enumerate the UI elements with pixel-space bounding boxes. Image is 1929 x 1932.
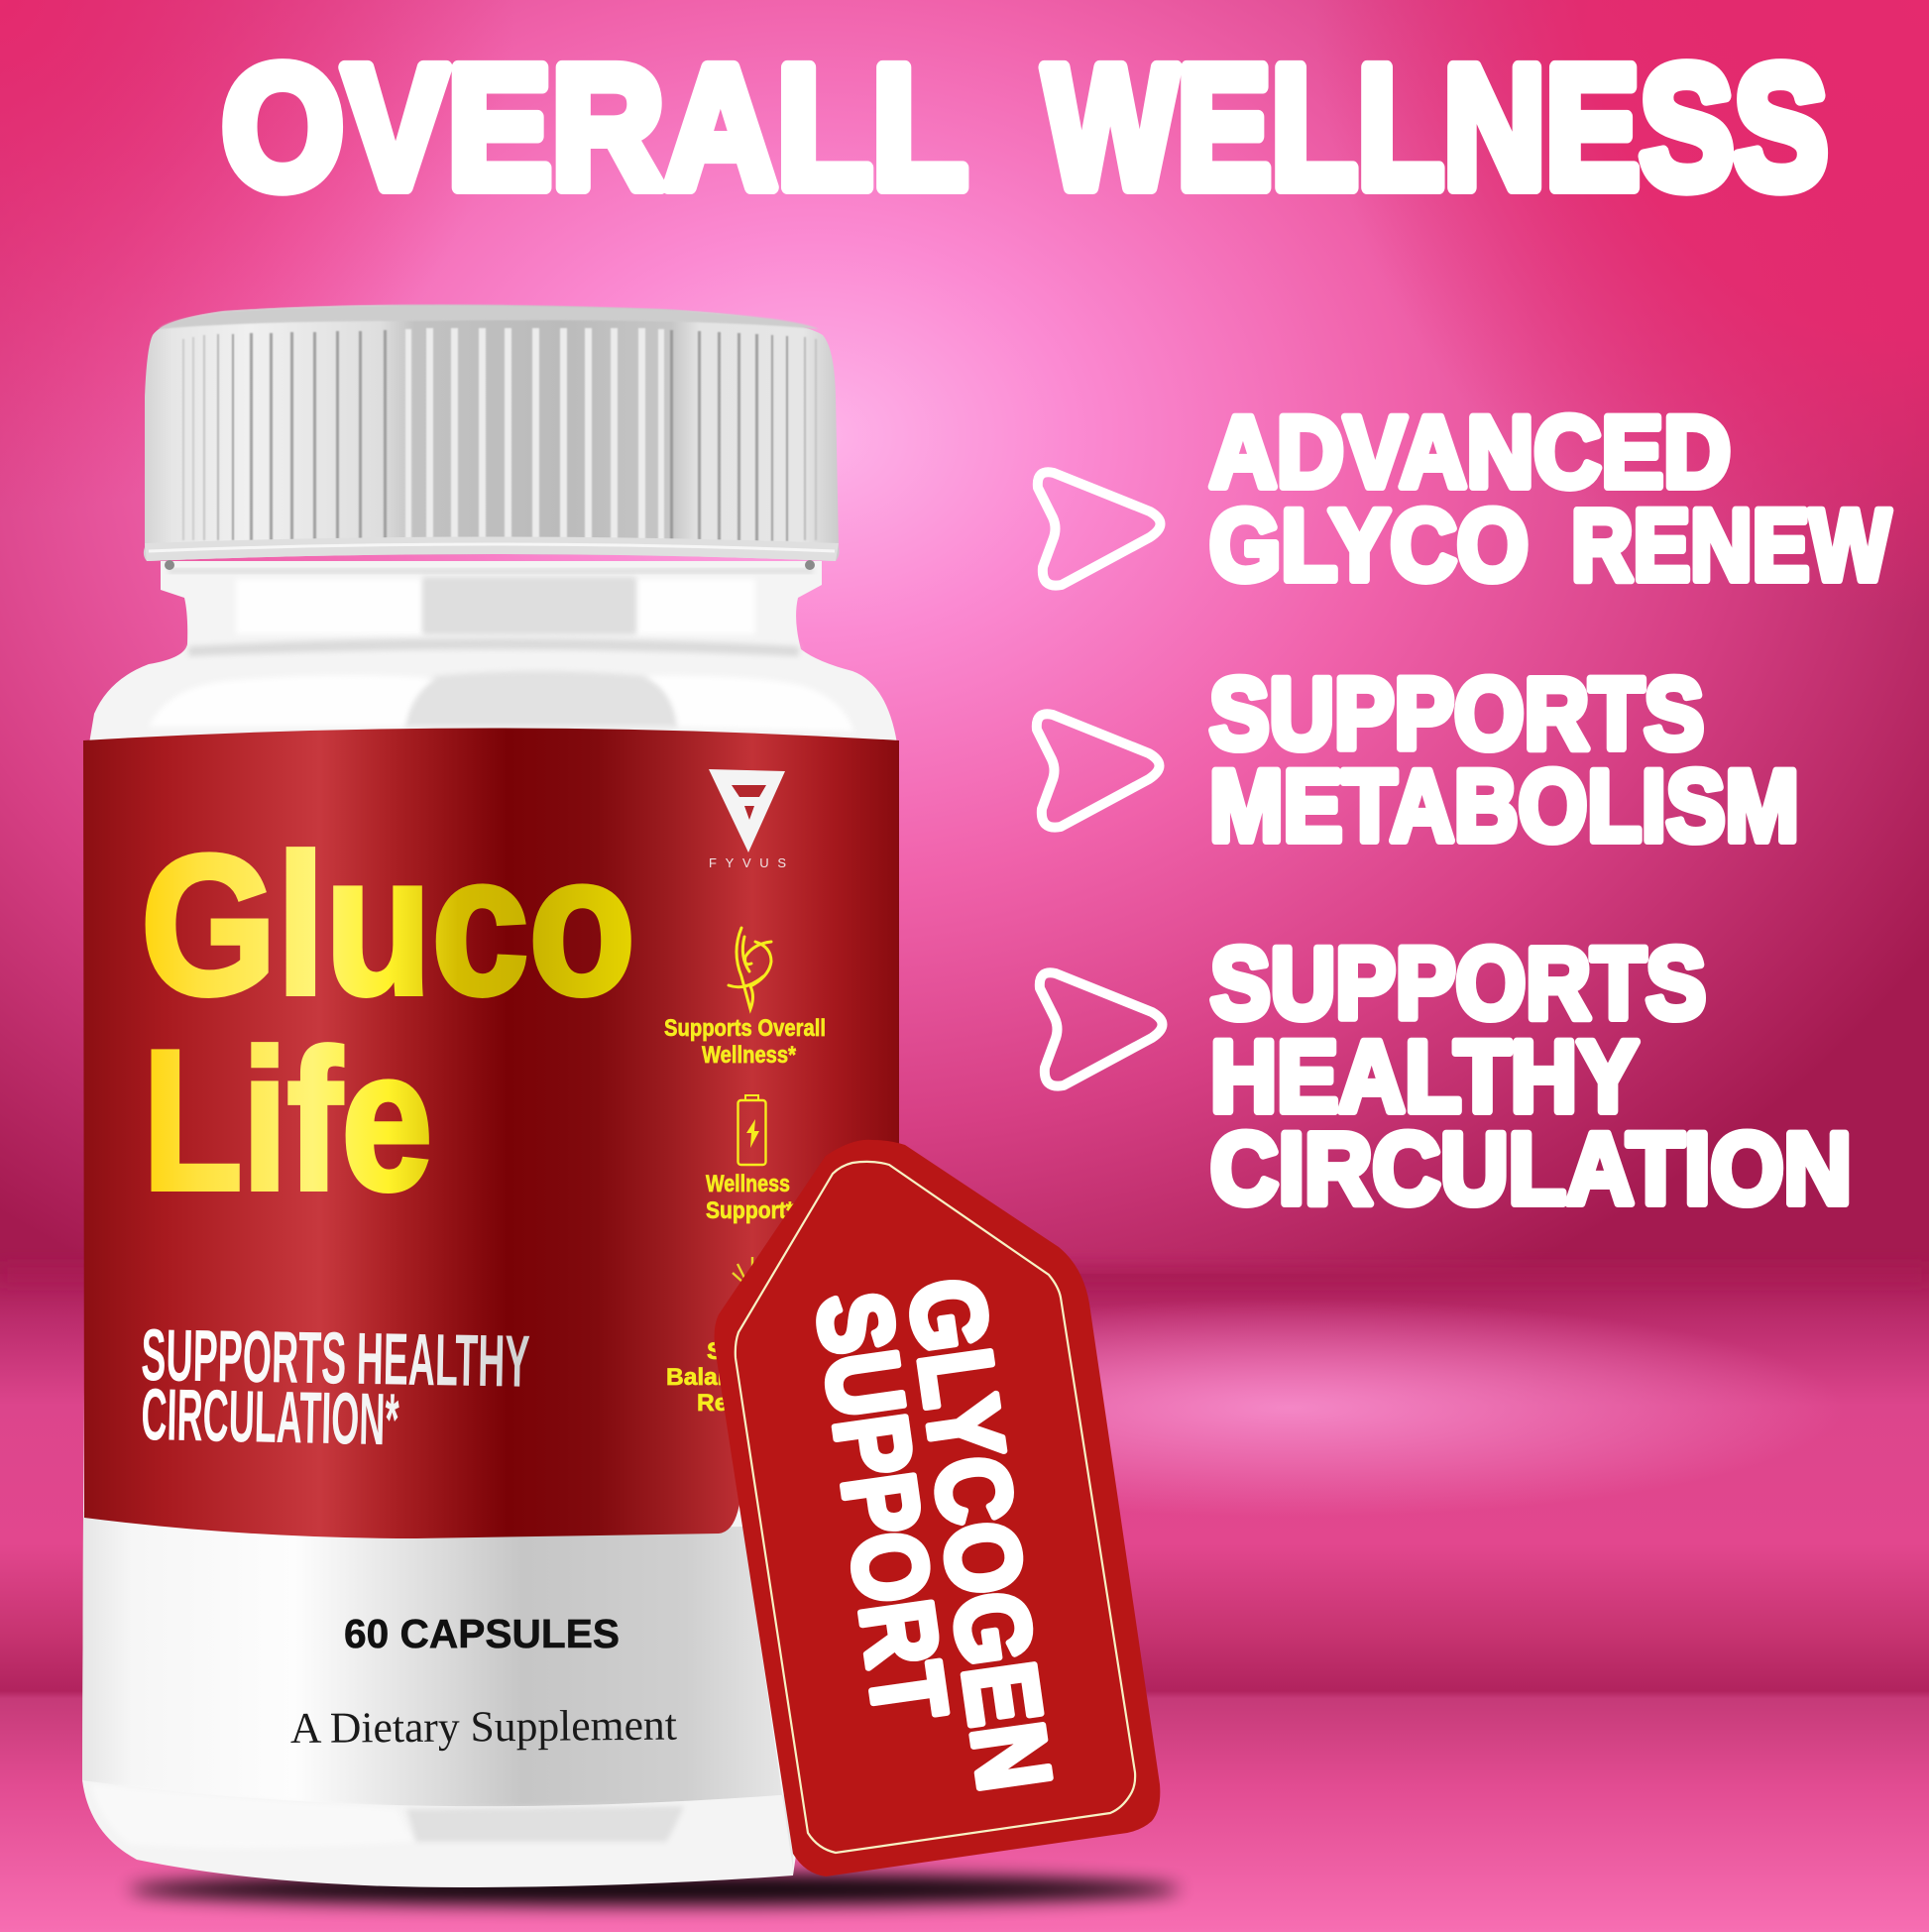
supplement line: A Dietary Supplement bbox=[290, 1701, 677, 1753]
cap top rim bbox=[159, 304, 819, 329]
product name: Gluco bbox=[141, 815, 635, 1036]
brand logo bbox=[709, 769, 786, 870]
benefit: overall wellness bbox=[664, 1015, 826, 1069]
benefit: partly hidden by tag: Re bbox=[697, 1390, 728, 1417]
benefit 3: supports healthy circulation bbox=[1040, 927, 1852, 1225]
icon: arrow 2 bbox=[1037, 714, 1160, 828]
benefit 2: supports metabolism bbox=[1037, 657, 1799, 862]
text block 1: ADVANCED bbox=[1209, 396, 1731, 509]
cap bbox=[144, 304, 840, 570]
benefit: partly hidden by tag: Balan bbox=[666, 1364, 733, 1391]
cap ribs bbox=[182, 328, 817, 541]
text block 3 bbox=[1210, 927, 1852, 1225]
tag inner stitch line bbox=[736, 1162, 1135, 1853]
benefit 1: advanced glyco renew bbox=[1038, 396, 1891, 602]
benefit: overall wellness: Supports Overall bbox=[664, 1015, 826, 1042]
benefit: partly hidden by tag bbox=[666, 1338, 738, 1417]
neck and shoulder highlights bbox=[149, 569, 854, 732]
icon: rays bbox=[733, 1257, 752, 1283]
icon: battery bbox=[738, 1095, 765, 1165]
label claim bbox=[141, 1313, 530, 1460]
red product label bbox=[83, 728, 899, 1538]
text block 2: SUPPORTS bbox=[1209, 657, 1704, 770]
benefit list bbox=[1037, 396, 1891, 1225]
bottle base highlights bbox=[91, 1784, 684, 1848]
title: OVERALL bbox=[222, 31, 967, 225]
benefit: partly hidden by tag: Su bbox=[707, 1338, 738, 1365]
tag text: SUPPORT bbox=[794, 1286, 967, 1727]
text block 3: SUPPORTS bbox=[1210, 927, 1706, 1040]
product name bbox=[141, 815, 635, 1231]
icon: wellness figure bbox=[729, 928, 771, 1009]
benefit: wellness support: Wellness bbox=[706, 1171, 790, 1197]
tag shape bbox=[715, 1140, 1160, 1876]
text block 3: HEALTHY bbox=[1210, 1020, 1639, 1133]
text block 3: CIRCULATION bbox=[1210, 1112, 1852, 1225]
benefit: wellness support bbox=[706, 1171, 794, 1224]
text block 2 bbox=[1209, 657, 1799, 862]
bottle shadow bbox=[129, 1874, 1180, 1905]
icon: arrow 1 bbox=[1038, 472, 1160, 586]
text block 1: GLYCO bbox=[1209, 489, 1529, 602]
capsule count: 60 CAPSULES bbox=[344, 1611, 620, 1656]
label claim: SUPPORTS HEALTHY bbox=[141, 1313, 530, 1403]
product name: Life bbox=[143, 1010, 432, 1231]
tag text bbox=[794, 1272, 1072, 1797]
benefit: overall wellness: Wellness* bbox=[702, 1042, 796, 1069]
icon: arrow 3 bbox=[1040, 972, 1162, 1086]
tag text: GLYCOGEN bbox=[886, 1272, 1072, 1797]
cap lower lip bbox=[145, 537, 839, 561]
glycogen support tag bbox=[715, 1140, 1160, 1876]
benefit: wellness support: Support* bbox=[706, 1197, 794, 1224]
label claim: CIRCULATION* bbox=[141, 1373, 399, 1460]
product bottle bbox=[82, 304, 899, 1887]
text block 2: METABOLISM bbox=[1209, 749, 1799, 862]
white lower label band bbox=[82, 1512, 793, 1870]
bottle body bbox=[82, 561, 899, 1887]
title bbox=[222, 31, 1828, 225]
brand logo: FYVUS bbox=[709, 855, 786, 870]
text block 1 bbox=[1209, 396, 1891, 602]
